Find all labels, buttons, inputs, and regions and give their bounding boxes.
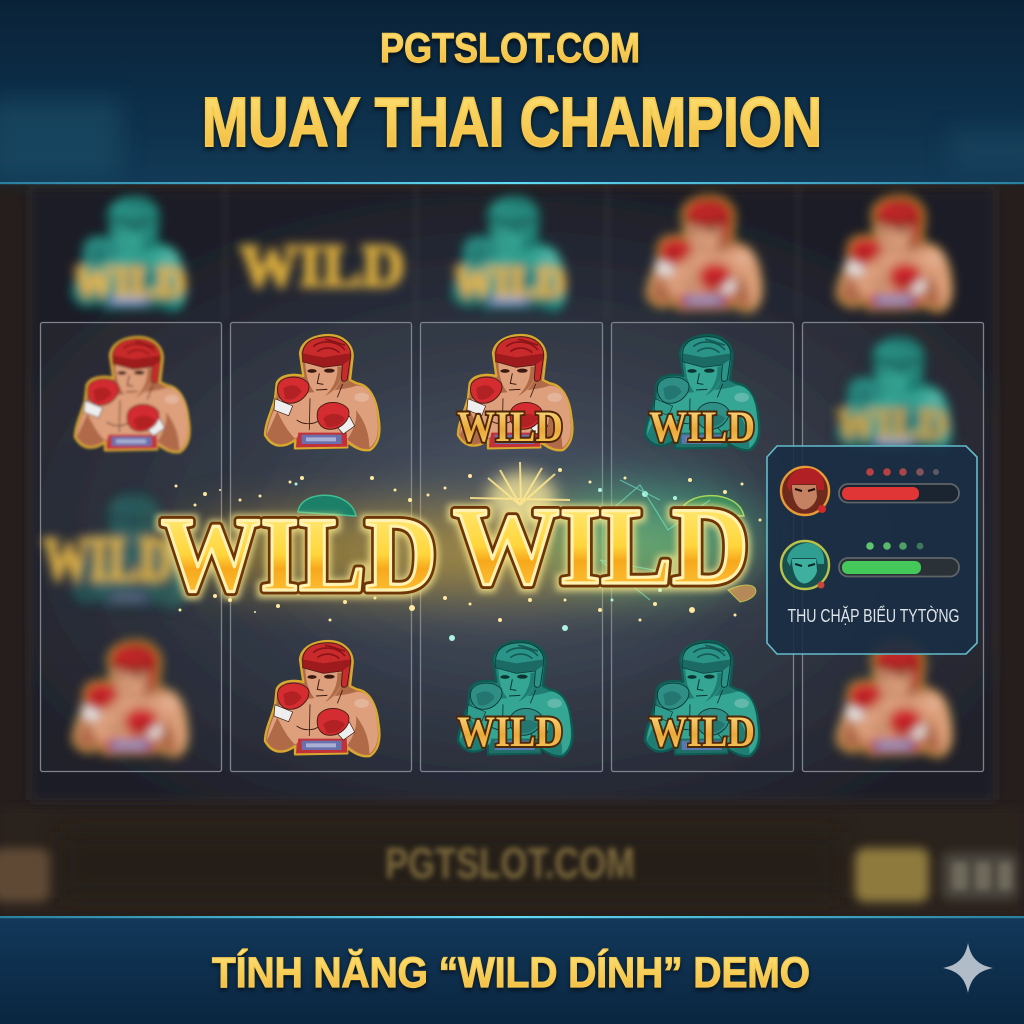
- footer caption: TÍNH NĂNG “WILD DÍNH” DEMO: [212, 949, 810, 997]
- sharp boxer with wild: red, reel 3 row 1: WILD: [457, 404, 563, 451]
- blurred top reel row: WILD: [454, 260, 566, 306]
- icon: four-point star: [943, 943, 993, 993]
- soft-focus symbols in grid: WILD: [836, 402, 948, 448]
- soft-focus symbols in grid: [43, 337, 951, 756]
- sharp boxer with wild: teal, reel 4 row 3: [645, 641, 759, 756]
- wild word left: WILD: [161, 496, 437, 613]
- main title: MUAY THAI CHAMPION: [202, 83, 822, 161]
- icon: red boxer avatar: [781, 467, 829, 515]
- sharp boxer: red, reel 2 row 3: [265, 641, 379, 756]
- panel: symbol collection: [767, 446, 977, 654]
- reel grid cells: [40, 322, 984, 772]
- wild word left: WILD: [161, 496, 437, 613]
- sharp boxer with wild: red, reel 3 row 1: [457, 335, 572, 451]
- site name: PGTSLOT.COM: [380, 24, 640, 71]
- green score bar: [839, 542, 959, 576]
- blurred top reel row: WILD: [74, 260, 186, 306]
- slot background: [0, 183, 1024, 918]
- sharp boxer with wild: teal, reel 4 row 3: WILD: [649, 709, 755, 756]
- sharp boxer with wild: teal, reel 4 row 1: WILD: [649, 404, 755, 451]
- blurred top reel row: [72, 196, 951, 311]
- red score bar: [839, 468, 959, 502]
- sharp boxer with wild: teal, reel 3 row 3: [457, 641, 572, 756]
- wild word right: WILD: [453, 485, 749, 607]
- soft-focus symbols in grid: WILD: [43, 526, 173, 594]
- wild banner with sparkles: [161, 462, 765, 641]
- blurred bottom control bar: PGTSLOT.COM: [385, 839, 635, 888]
- sharp boxer: red, reel 2 row 1: [265, 335, 379, 450]
- icon: teal boxer avatar: [781, 541, 829, 589]
- blurred top reel row: WILD: [240, 233, 404, 299]
- sharp boxer with wild: teal, reel 4 row 1: [645, 335, 759, 451]
- sharp boxer with wild: teal, reel 3 row 3: WILD: [457, 709, 563, 756]
- wild word right: WILD: [453, 485, 749, 607]
- wild banner with sparkles: WILD: [453, 486, 749, 608]
- panel: header band: [0, 0, 1024, 184]
- blurred bottom control bar: [0, 808, 1024, 918]
- panel caption: THU CHẶP BIỂU TYTỜNG: [788, 605, 960, 626]
- panel: footer band: [0, 916, 1024, 1024]
- wild banner with sparkles: WILD: [161, 497, 437, 614]
